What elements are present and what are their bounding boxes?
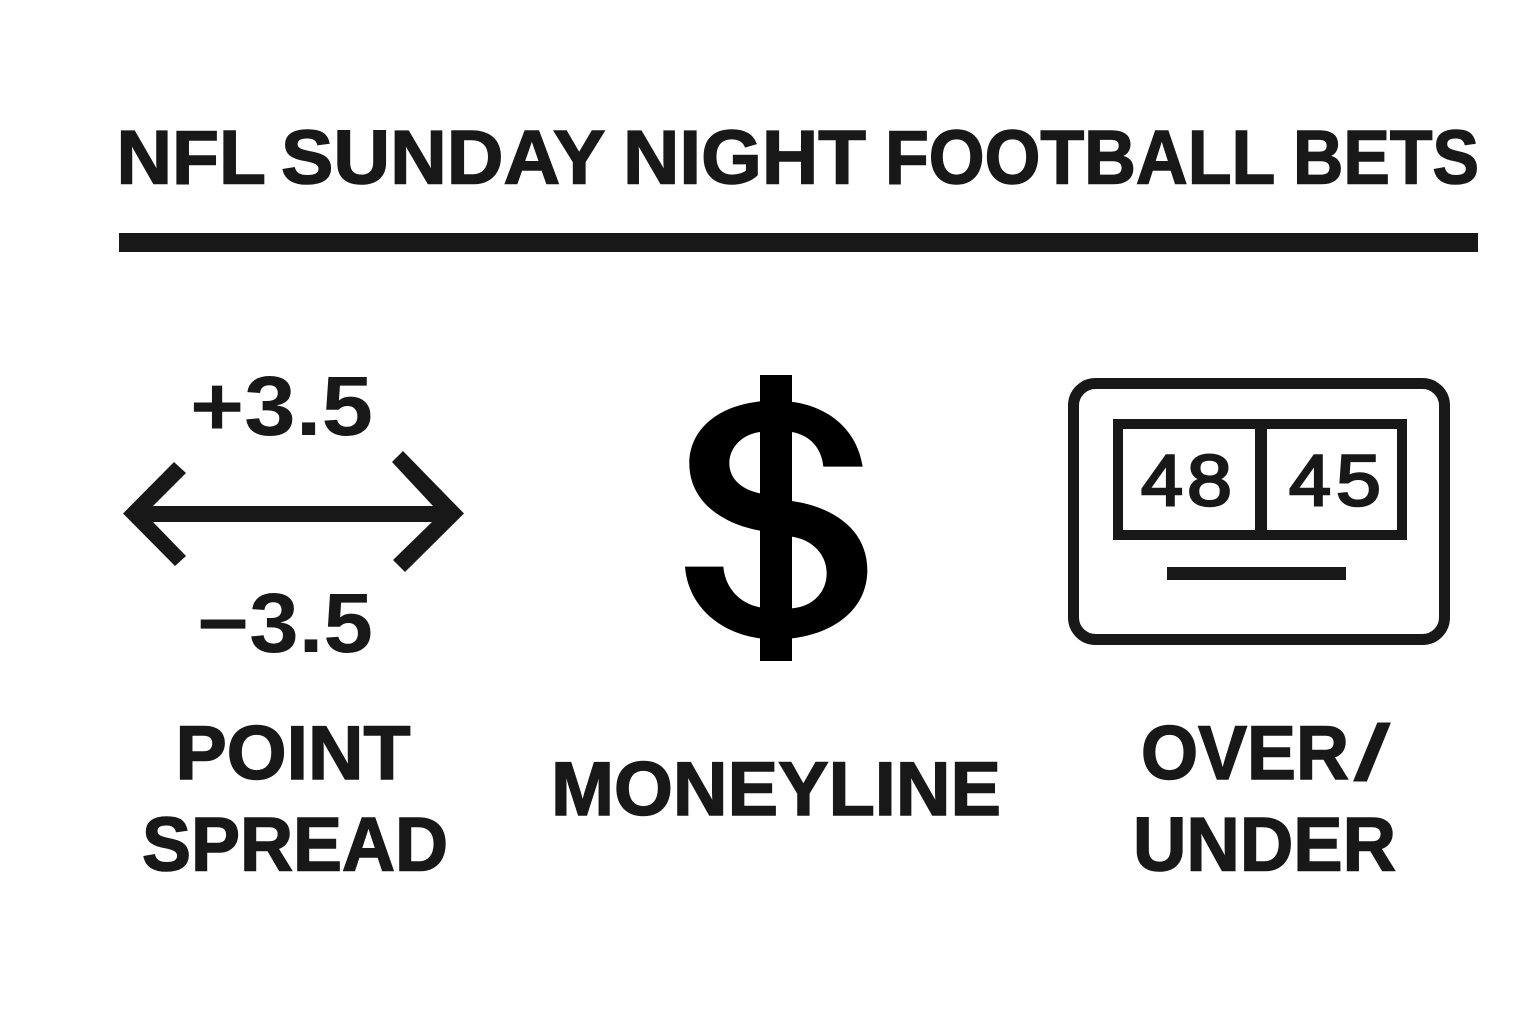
plus label: +3.5 <box>190 359 373 453</box>
panel: point spread <box>123 359 464 888</box>
icon: scoreboard <box>1074 384 1444 640</box>
over/under label: / <box>1356 711 1389 796</box>
title: FOOTBALL <box>885 116 1274 200</box>
minus label: −3.5 <box>197 576 373 670</box>
title: NIGHT <box>623 116 866 200</box>
title: BETS <box>1293 116 1479 200</box>
icon: double arrow <box>123 451 464 572</box>
over/under label: UNDER <box>1133 802 1396 888</box>
score 48: 4 <box>1141 442 1183 522</box>
panel: over/under <box>1074 384 1444 888</box>
title rule <box>119 233 1478 252</box>
panel: moneyline <box>551 375 1001 832</box>
over/under label: OVER <box>1141 711 1349 796</box>
title: NFL <box>116 116 264 200</box>
score 48: 8 <box>1187 442 1232 522</box>
point spread label: SPREAD <box>142 802 448 888</box>
score 45: 4 <box>1289 442 1331 522</box>
score 45: 5 <box>1336 442 1381 522</box>
title: SUNDAY <box>281 116 605 200</box>
moneyline label: MONEYLINE <box>551 747 1001 832</box>
icon: dollar sign <box>685 375 867 661</box>
point spread label: POINT <box>176 711 410 796</box>
